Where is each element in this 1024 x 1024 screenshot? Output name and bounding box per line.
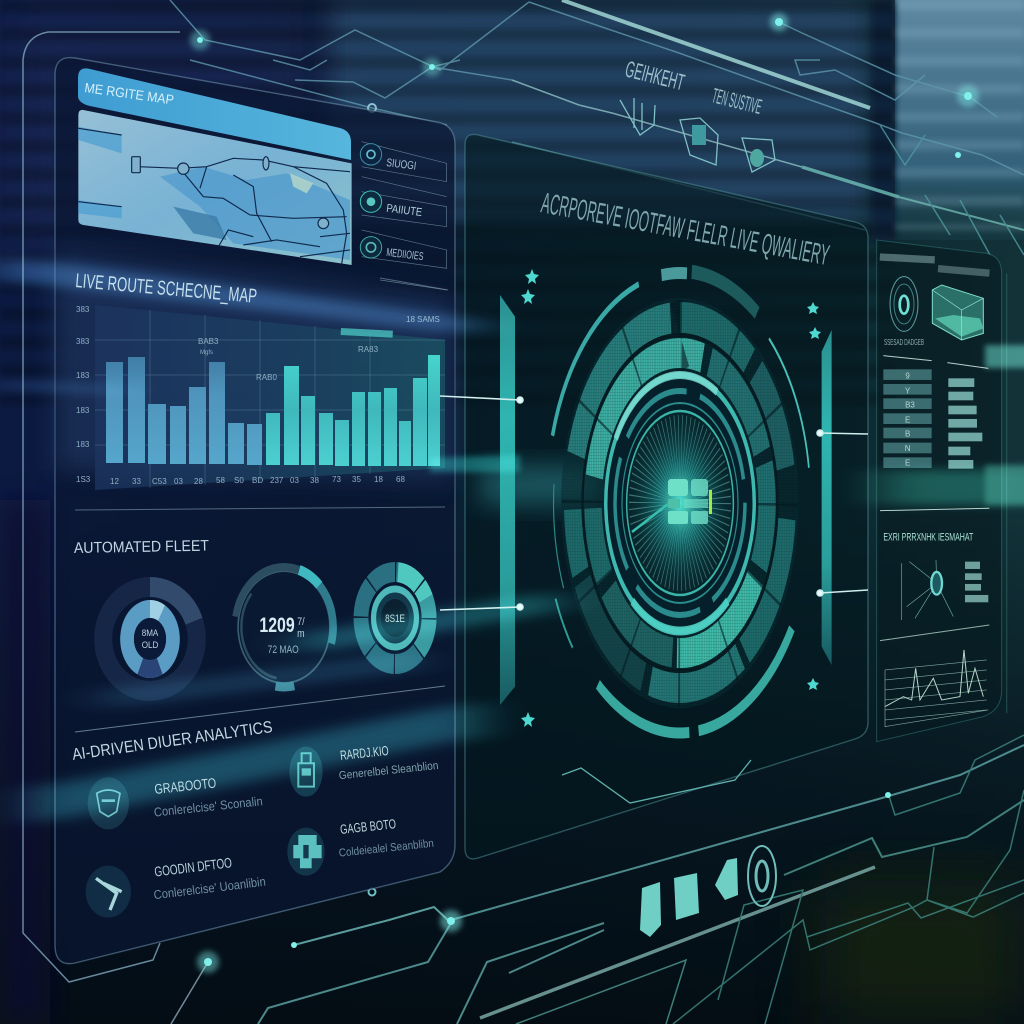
infographic canvas: TEN SUSTIVE	[710, 85, 764, 119]
bar chart: 183	[76, 440, 90, 449]
circuit glow nodes	[190, 13, 979, 973]
donut gauge 1: OLD	[142, 640, 158, 650]
bar chart: 383	[76, 305, 90, 314]
donut gauge 2: m	[297, 628, 305, 640]
outer arcs	[489, 173, 871, 833]
panel: central hud frame	[465, 134, 868, 859]
line chart	[885, 650, 988, 727]
map header: ME RGITE MAP	[84, 80, 175, 107]
table: E	[905, 415, 910, 424]
cube icon	[932, 285, 983, 340]
bar chart: 183	[76, 371, 90, 380]
bar chart: C53	[152, 477, 167, 486]
donut gauge 3: 8S1E	[385, 613, 405, 625]
segmented band	[528, 241, 832, 765]
item 4: GAGB BOTO	[339, 816, 397, 837]
route options list: PAIIUTE	[386, 203, 423, 219]
hud radial gauge	[489, 173, 871, 833]
bar chart: 58	[216, 476, 225, 485]
bottom gauge trace	[562, 760, 751, 803]
bar chart: 33	[132, 477, 141, 486]
bar chart: 35	[352, 475, 361, 484]
bottom icon row	[640, 846, 776, 937]
item 2	[86, 854, 267, 918]
table: Y	[905, 386, 911, 395]
bar chart: 03	[174, 477, 183, 486]
bar chart: 237	[270, 476, 284, 485]
table: N	[905, 444, 911, 453]
bar chart: 03	[290, 476, 299, 485]
table: B	[905, 430, 910, 439]
analytics items	[86, 743, 439, 918]
bar chart: Mgfs	[200, 350, 213, 356]
map header	[78, 68, 351, 160]
bar chart: S0	[234, 476, 244, 485]
route options list: MEDIIOIES	[386, 247, 424, 263]
donut gauge 2: 72 MAO	[268, 644, 299, 656]
donut gauge 2: 7/	[297, 616, 305, 628]
top mini icons	[620, 98, 775, 172]
panel: right dashboard	[877, 240, 1007, 742]
item 4	[287, 816, 434, 876]
hud side bars	[500, 295, 832, 705]
network diagram	[902, 560, 988, 620]
bar chart: RAB0	[256, 373, 277, 382]
item 2: GOODIN DFTOO	[153, 854, 233, 880]
item 3	[289, 743, 439, 797]
heading: AI driven analytics	[71, 686, 445, 764]
bar chart: 183	[76, 406, 90, 415]
item 2: Conlerelcise' Uoanlibin	[153, 875, 267, 902]
item 3: Generelbel Sleanblion	[338, 760, 439, 782]
bar chart: 12	[110, 477, 119, 486]
bar chart: BAB3	[198, 337, 219, 346]
bar chart: RA83	[358, 345, 379, 354]
panel: route map	[78, 68, 352, 265]
donut gauge 3	[350, 557, 440, 679]
heading: AI driven analytics: AI-DRIVEN DIUER ANALYTICS	[71, 718, 274, 764]
bar chart: 28	[194, 477, 203, 486]
map	[78, 110, 352, 265]
item 1: GRABOOTO	[154, 775, 217, 797]
top header labels: GEIHKEHT	[623, 56, 687, 95]
table: 9	[905, 371, 910, 380]
route options list: SIUOGI	[386, 157, 417, 173]
table: E	[905, 458, 910, 467]
heading: automated fleet: AUTOMATED FLEET	[74, 538, 210, 557]
table: SSESAD DADGEB	[884, 338, 924, 347]
item 4: Coldeiealel Seanblibn	[338, 838, 434, 860]
divider lines on left panel	[75, 278, 448, 510]
route options list	[360, 142, 447, 290]
connector lines	[440, 396, 868, 610]
bar chart	[76, 305, 445, 490]
hud star markers	[521, 269, 821, 727]
bar chart: BD	[252, 476, 263, 485]
heading: live route: LIVE ROUTE SCHECNE_MAP	[75, 270, 258, 308]
donut gauge 1	[103, 587, 197, 691]
target icon	[890, 277, 918, 331]
network label: EXRI PRRXNHK IESMAHAT	[883, 532, 974, 544]
donut gauge 1: 8MA	[142, 628, 159, 638]
donut gauge 2: 1209	[259, 615, 295, 637]
item 1	[88, 775, 263, 829]
bar chart: 18 SAMS	[406, 315, 440, 324]
item 1: Conlerelcise' Sconalin	[153, 794, 263, 820]
motion streaks	[0, 255, 1024, 825]
bar chart: 38	[310, 476, 319, 485]
hud center readout	[632, 479, 712, 532]
bar chart: 1S3	[76, 475, 91, 484]
bar chart: 68	[396, 475, 405, 484]
bar chart: 18	[374, 475, 383, 484]
right panel header	[880, 253, 990, 277]
teal wash behind gauge	[480, 465, 600, 505]
bar chart: 73	[332, 475, 341, 484]
donut gauge 2	[214, 542, 354, 712]
bar chart: 383	[76, 337, 90, 346]
table	[883, 338, 988, 469]
inner rings	[606, 375, 754, 631]
panel: left dashboard	[55, 58, 455, 964]
table: B3	[905, 401, 915, 410]
item 3: RARDJ.KIO	[339, 743, 389, 763]
mesh overlay on band	[561, 298, 799, 708]
